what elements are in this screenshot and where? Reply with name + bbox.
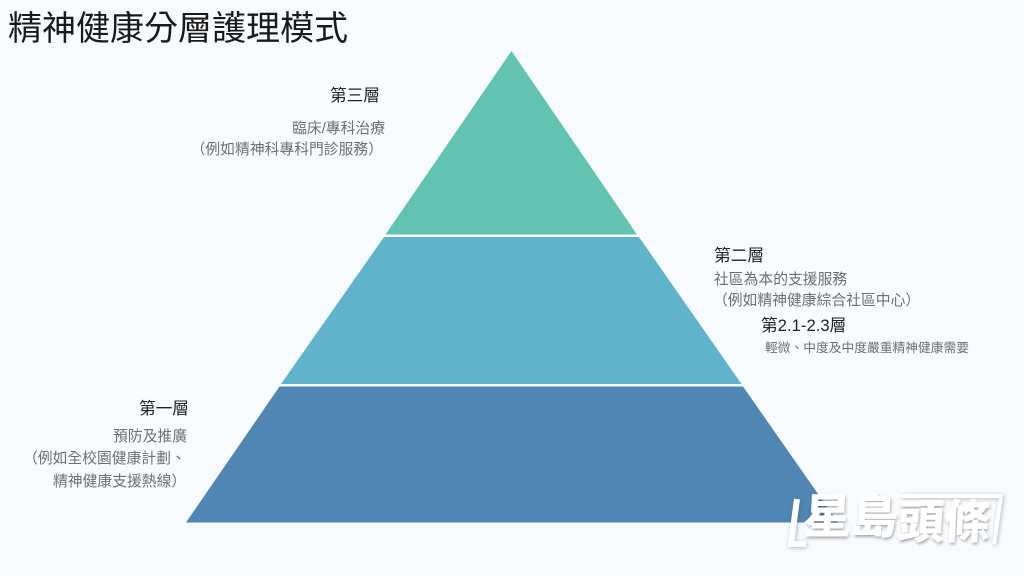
tier 2 description	[713, 271, 920, 309]
tier 2 heading: 第二層	[714, 246, 764, 265]
watermark brackets	[786, 492, 1006, 550]
label: tier 1	[23, 399, 189, 490]
tier 2.1-2.3 heading: 第2.1-2.3層	[761, 316, 846, 335]
tier 3 description: （例如精神科專科門診服務）	[191, 142, 383, 158]
pyramid tier 1	[186, 386, 838, 522]
tier 2 description: 社區為本的支援服務	[714, 272, 847, 288]
label: tier 3	[191, 86, 385, 158]
watermark text: 星島	[803, 490, 899, 543]
tier 2.1-2.3 description: 輕微、中度及中度嚴重精神健康需要	[765, 340, 969, 355]
tier 3 description: 臨床/專科治療	[292, 121, 385, 137]
pyramid tier 3	[386, 51, 637, 234]
tier 3 heading: 第三層	[330, 86, 380, 105]
watermark logo	[786, 490, 1006, 550]
label: tier 2	[713, 246, 969, 355]
tier 1 description: （例如全校園健康計劃、	[23, 451, 186, 467]
tier 1 description	[23, 428, 187, 490]
tier 1 description: 預防及推廣	[113, 429, 187, 445]
pyramid tier 2	[281, 237, 742, 384]
title: 精神健康分層護理模式	[8, 10, 348, 48]
tier 2 description: （例如精神健康綜合社區中心）	[713, 293, 920, 309]
tier 1 heading: 第一層	[139, 399, 189, 418]
tier 3 description	[191, 120, 385, 158]
tier 1 description: 精神健康支援熱線）	[53, 474, 186, 490]
watermark text continued: 頭條	[897, 496, 991, 548]
